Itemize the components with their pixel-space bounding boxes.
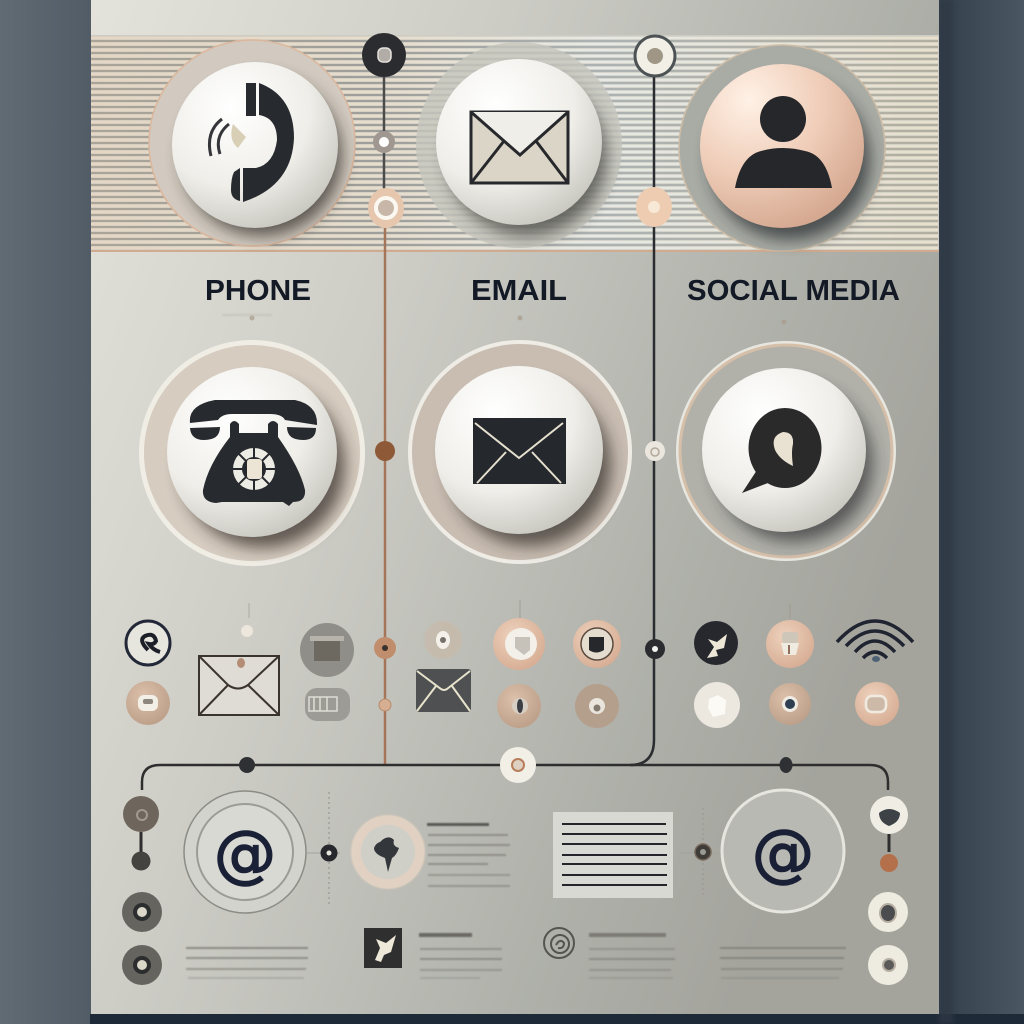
icon: telephone handset — [209, 83, 294, 202]
connector node with dotted line: left — [306, 792, 340, 905]
icon: outlined handset circle — [126, 621, 170, 665]
striped header band — [91, 35, 939, 252]
icon: wifi arcs — [837, 621, 913, 662]
connector: left vertical line — [384, 70, 385, 765]
heading: Email: EMAIL — [471, 275, 567, 307]
icon: line envelope — [199, 603, 279, 715]
icon: outlined envelope — [471, 112, 568, 183]
icon: person silhouette — [735, 96, 832, 188]
connector: horizontal bus — [142, 765, 888, 790]
bolt square icon — [364, 928, 402, 968]
at-sign ring: right — [722, 790, 844, 912]
spiral icon — [544, 928, 574, 958]
heading: Social Media: SOCIAL MEDIA — [687, 275, 900, 307]
icon: tan eye badge — [769, 683, 811, 725]
email icon cluster — [416, 600, 621, 728]
left column nodes — [122, 796, 162, 985]
icon: grey rounded label — [305, 688, 350, 721]
social media profile button — [679, 45, 885, 251]
icon: tan drop badge — [575, 684, 619, 728]
desk telephone button — [139, 340, 365, 566]
icon: speech bubble — [742, 408, 822, 493]
connector: right vertical line — [630, 70, 654, 765]
icon: ringed mug badge — [573, 620, 621, 668]
placeholder text block: bottom centre right — [589, 933, 675, 979]
placeholder text block: centre left — [427, 823, 510, 887]
icon: dark envelope — [416, 669, 471, 712]
phone handset button — [149, 40, 355, 246]
icon: peach frame badge — [855, 682, 899, 726]
social icon cluster — [694, 604, 913, 728]
icon: grey building badge — [300, 623, 354, 677]
closed envelope button — [408, 340, 632, 564]
connector node with dotted line: right — [680, 808, 722, 895]
timeline nodes: right line — [635, 36, 675, 659]
icon: dark bolt badge — [694, 621, 738, 665]
heading caption marks — [222, 314, 786, 324]
peach ring with glyph — [351, 815, 425, 889]
lined note card — [553, 812, 673, 898]
bus junction nodes — [239, 747, 792, 783]
placeholder text block: bottom left — [186, 947, 308, 979]
email envelope button — [416, 42, 622, 248]
at-sign ring: left: @ — [214, 817, 276, 890]
icon: rotary telephone — [190, 400, 317, 506]
icon: tan badge with dark dot — [497, 684, 541, 728]
at-sign ring: left — [184, 791, 306, 913]
icon: cream badge — [694, 682, 740, 728]
at-sign ring: right: @ — [752, 816, 814, 889]
chat bubble button — [676, 341, 896, 561]
right column nodes — [868, 796, 908, 985]
icon: tan badge — [126, 681, 170, 725]
icon: peach cup badge — [766, 604, 814, 668]
icon: soft tan dot — [424, 621, 462, 659]
phone icon cluster — [126, 603, 354, 725]
icon: peach and white badge — [493, 600, 545, 670]
placeholder text block: bottom right — [720, 947, 846, 979]
timeline nodes: left line — [362, 33, 406, 711]
icon: solid envelope — [473, 418, 566, 484]
heading: Phone: PHONE — [205, 275, 311, 307]
placeholder text block: bottom centre left — [419, 933, 502, 979]
